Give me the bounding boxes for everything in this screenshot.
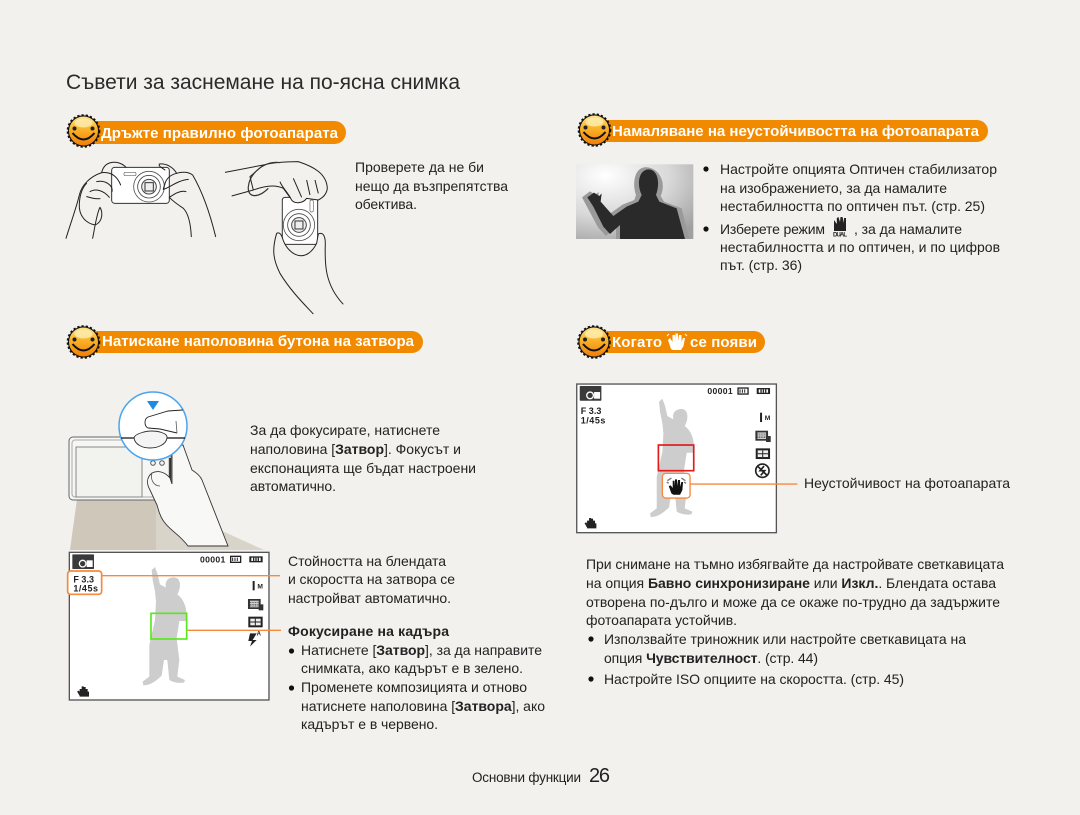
text: low light advice: фотоапарата устойчив. (586, 612, 737, 628)
text: focus frame: снимката, ако кадърът е в зелено. (301, 660, 523, 676)
text: reduce shake bullets: път. (стр. 36) (720, 257, 802, 273)
camera screen: focus frame: 00001 (200, 554, 225, 564)
heading: half-press shutter (68, 326, 423, 358)
text: focus frame: Променете композицията и отново (301, 679, 527, 695)
text: aperture and shutter value (288, 553, 455, 606)
text: low light advice: отворена по-дълго и може да се окаже по-трудно да задържите (586, 594, 1000, 610)
camera screen: shake warning: 00001 (707, 386, 733, 396)
text: reduce shake bullets: на изображението, за да намалите (720, 180, 947, 196)
heading: when shake icon appears: Когато (612, 334, 662, 351)
text: check nothing blocks the lens (355, 159, 508, 212)
text: focus frame: натиснете наполовина [Затвора], ако (301, 698, 545, 714)
text: low light advice: на опция Бавно синхронизиране или Изкл.. Блендата остава (586, 575, 996, 591)
camera screen: shake warning (577, 384, 797, 533)
illustration: two hands holding camera horizontally (66, 162, 216, 238)
red focus frame (658, 445, 694, 471)
title: Съвети за заснемане на по-ясна снимка (66, 71, 460, 94)
text: aperture and shutter value: Стойността на блендата (288, 553, 446, 569)
heading: when shake icon appears: се появи (690, 334, 757, 351)
text: half press instructions (250, 422, 476, 494)
heading: half-press shutter: Натискане наполовина бутона на затвора (102, 333, 415, 350)
aperture and shutter readout: 1/45s (73, 584, 98, 594)
illustration: camera back with hand (69, 437, 228, 546)
text: low light advice: Настройте ISO опциите на скоростта. (стр. 45) (604, 671, 904, 687)
text: reduce shake bullets: нестабилността и по оптичен, и по цифров (720, 239, 1000, 255)
footer: section name and page number (472, 765, 610, 787)
text: reduce shake bullets: Настройте опцията Оптичен стабилизатор (720, 161, 997, 177)
text: reduce shake bullets: нестабилността по оптичен път. (стр. 25) (720, 198, 985, 214)
text: reduce shake bullets (703, 161, 1000, 273)
camera screen: shake warning: F 3.3 (581, 406, 601, 416)
aperture and shutter readout (68, 571, 102, 594)
text: check nothing blocks the lens: нещо да възпрепятства (355, 178, 508, 194)
text: focus frame: кадърът е в червено. (301, 716, 438, 732)
footer: section name and page number: Основни функции (472, 770, 581, 785)
aperture and shutter readout: F 3.3 (73, 574, 94, 584)
text: reduce shake bullets: , за да намалите (854, 221, 962, 237)
text: focus frame: Натиснете [Затвор], за да направите (301, 642, 542, 658)
footer: section name and page number: 26 (589, 765, 610, 787)
shake warning callout (662, 473, 690, 498)
icon: shaking hand white (667, 334, 687, 350)
heading: when shake icon appears (578, 326, 765, 358)
text: half press instructions: наполовина [Затвор]. Фокусът и (250, 441, 461, 457)
text: reduce shake bullets: Изберете режим (720, 221, 825, 237)
heading: reducing camera shake (579, 114, 988, 146)
label: camera shake: Неустойчивост на фотоапарата (804, 475, 1010, 491)
text: half press instructions: За да фокусирате, натиснете (250, 422, 440, 438)
camera screen: shake warning: 1/45s (581, 415, 605, 425)
camera screen: shake warning: M (765, 415, 771, 422)
heading: reducing camera shake: Намаляване на неустойчивостта на фотоапарата (612, 123, 980, 140)
icon: dual hand mode (833, 217, 847, 238)
illustration: hands holding camera vertically (225, 162, 343, 314)
text: check nothing blocks the lens: Проверете да не би (355, 159, 484, 175)
beige projection wedge (70, 499, 264, 550)
text: focus frame: Фокусиране на кадъра (288, 623, 449, 639)
text: aperture and shutter value: настройват автоматично. (288, 590, 451, 606)
text: check nothing blocks the lens: обектива. (355, 196, 417, 212)
text: aperture and shutter value: и скоростта на затвора се (288, 571, 455, 587)
text: low light advice: опция Чувствителност. (стр. 44) (604, 650, 818, 666)
green focus frame (151, 613, 187, 639)
photo: blurred silhouette of man waving (576, 164, 693, 239)
text: focus frame (288, 623, 545, 732)
leader line (690, 482, 797, 486)
camera screen: focus frame: M (257, 583, 263, 590)
text: half press instructions: експонацията ще бъдат настроени (250, 460, 476, 476)
heading: hold the camera correctly (68, 115, 346, 147)
leader lines (102, 576, 281, 630)
zoom circle: shutter press (119, 392, 187, 460)
camera screen: focus frame (68, 552, 281, 700)
text: half press instructions: автоматично. (250, 478, 336, 494)
heading: hold the camera correctly: Дръжте правилно фотоапарата (101, 125, 339, 142)
text: low light advice: При снимане на тъмно избягвайте да настройвате светкавицата (586, 556, 1004, 572)
camera screen: focus frame: A (257, 632, 262, 638)
icon: dual hand mode: DUAL (833, 232, 847, 238)
text: low light advice: Използвайте триножник или настройте светкавицата на (604, 631, 966, 647)
text: low light advice (586, 556, 1004, 687)
